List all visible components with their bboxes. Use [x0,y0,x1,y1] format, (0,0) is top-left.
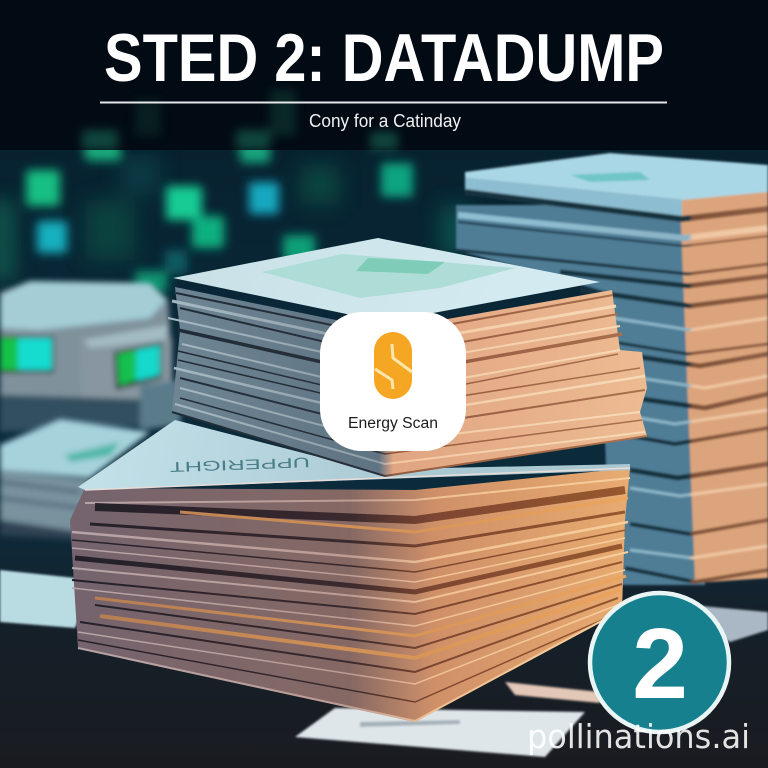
lower stack top sheet [78,420,630,490]
background wall [0,150,768,540]
right background paper stack [456,153,768,585]
left background paper stack [0,419,150,540]
dim background glow [0,155,470,280]
subtitle: Cony for a Catinday [309,111,461,131]
blurred green data lights [26,143,413,293]
header band [0,0,768,150]
upper stack top sheet [173,238,600,322]
lower paper stack [70,468,630,722]
step number badge: 2 [632,608,688,720]
icon label: Energy Scan [348,415,438,432]
upper paper stack [168,287,647,476]
app icon card: Energy Scan [320,312,466,451]
title divider [100,102,667,104]
watermark: pollinations.ai [527,717,750,756]
loose papers on the table [0,570,768,757]
title: STED 2: DATADUMP [104,20,664,96]
lower stack top sheet: UPPERIGHT [169,455,310,475]
step number badge [590,593,729,732]
servers in the background [0,281,185,432]
icon: yellow S mark [374,332,412,399]
table surface [0,530,768,768]
